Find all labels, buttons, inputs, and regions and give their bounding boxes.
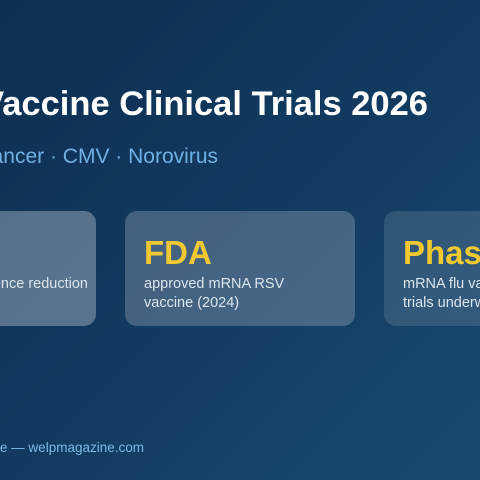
stat card: incidence reduction xyxy=(0,211,96,326)
card heading: FDA xyxy=(144,234,212,271)
stat card: FDA approval xyxy=(125,211,355,326)
stat card: flu vaccine phase xyxy=(384,211,480,326)
card description xyxy=(144,276,284,311)
card description: vaccine (2024) xyxy=(144,295,239,311)
card description: approved mRNA RSV xyxy=(144,276,284,292)
card description xyxy=(403,276,480,311)
